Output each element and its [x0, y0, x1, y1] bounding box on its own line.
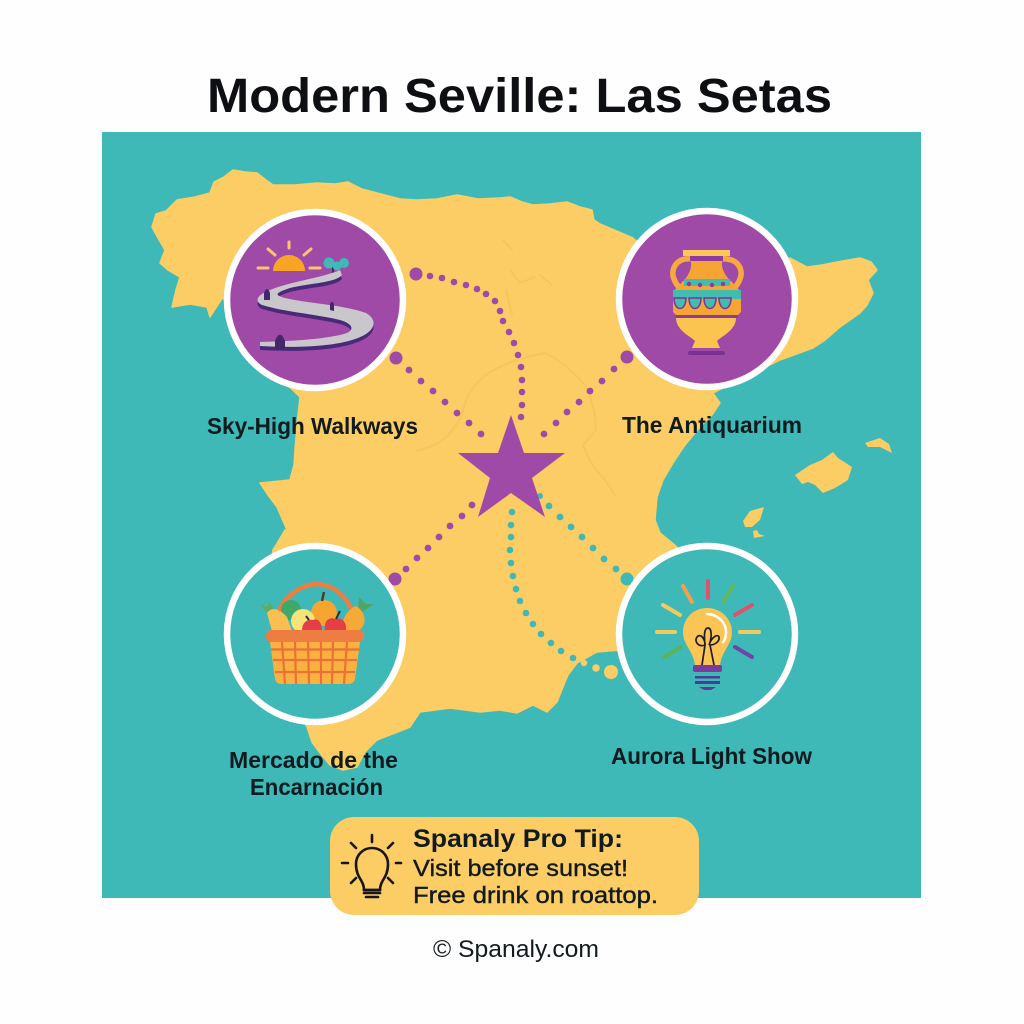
icon: outline light bulb — [342, 835, 401, 897]
route: dotted curve from star to south coast — [507, 509, 618, 679]
panel: Mercado badge — [227, 546, 403, 722]
route: dotted arc from walkways to star — [410, 268, 525, 420]
map: Ibiza — [743, 507, 764, 527]
icon: winding walkway — [258, 270, 374, 351]
label: Mercado de the Encarnacion — [229, 747, 398, 800]
icon: rainbow light bulb — [657, 581, 759, 690]
icon: sun — [258, 242, 320, 271]
icon: fruit basket — [260, 584, 374, 684]
label: Mercado de the Encarnacion: Mercado de the — [229, 747, 398, 773]
map: Spain mainland — [152, 170, 877, 770]
route: dotted line from walkways to star — [390, 352, 484, 437]
panel: Sky-High Walkways badge — [227, 212, 403, 388]
text: tip line one: Visit before sunset! — [413, 855, 628, 881]
text: tip heading: Spanaly Pro Tip: — [413, 825, 623, 853]
label: Mercado de the Encarnacion: Encarnación — [250, 774, 383, 800]
map: Menorca — [865, 438, 892, 453]
callout: pro tip — [330, 817, 699, 915]
route: dotted line from antiquarium to star — [541, 350, 634, 437]
label: Sky-High Walkways: Sky-High Walkways — [207, 413, 418, 439]
panel: Aurora Light Show badge — [619, 546, 795, 722]
label: Aurora Light Show: Aurora Light Show — [611, 743, 812, 769]
text: tip line two: Free drink on roattop. — [413, 882, 658, 908]
footer copyright: © Spanaly.com — [433, 936, 599, 963]
panel: The Antiquarium badge — [619, 211, 795, 387]
route: dotted line from light show to star — [537, 493, 634, 586]
icon: amphora — [673, 250, 741, 355]
route: dotted line from market to star — [388, 502, 475, 586]
map: Formentera — [753, 530, 765, 538]
map: Mallorca — [795, 452, 852, 493]
label: The Antiquarium: The Antiquarium — [622, 412, 802, 438]
icon: Seville star marker — [458, 415, 565, 517]
icon: palm trees — [324, 258, 349, 277]
map: rivers — [417, 240, 615, 495]
panel: teal map background — [102, 132, 921, 898]
title: Modern Seville: Las Setas — [207, 70, 832, 123]
